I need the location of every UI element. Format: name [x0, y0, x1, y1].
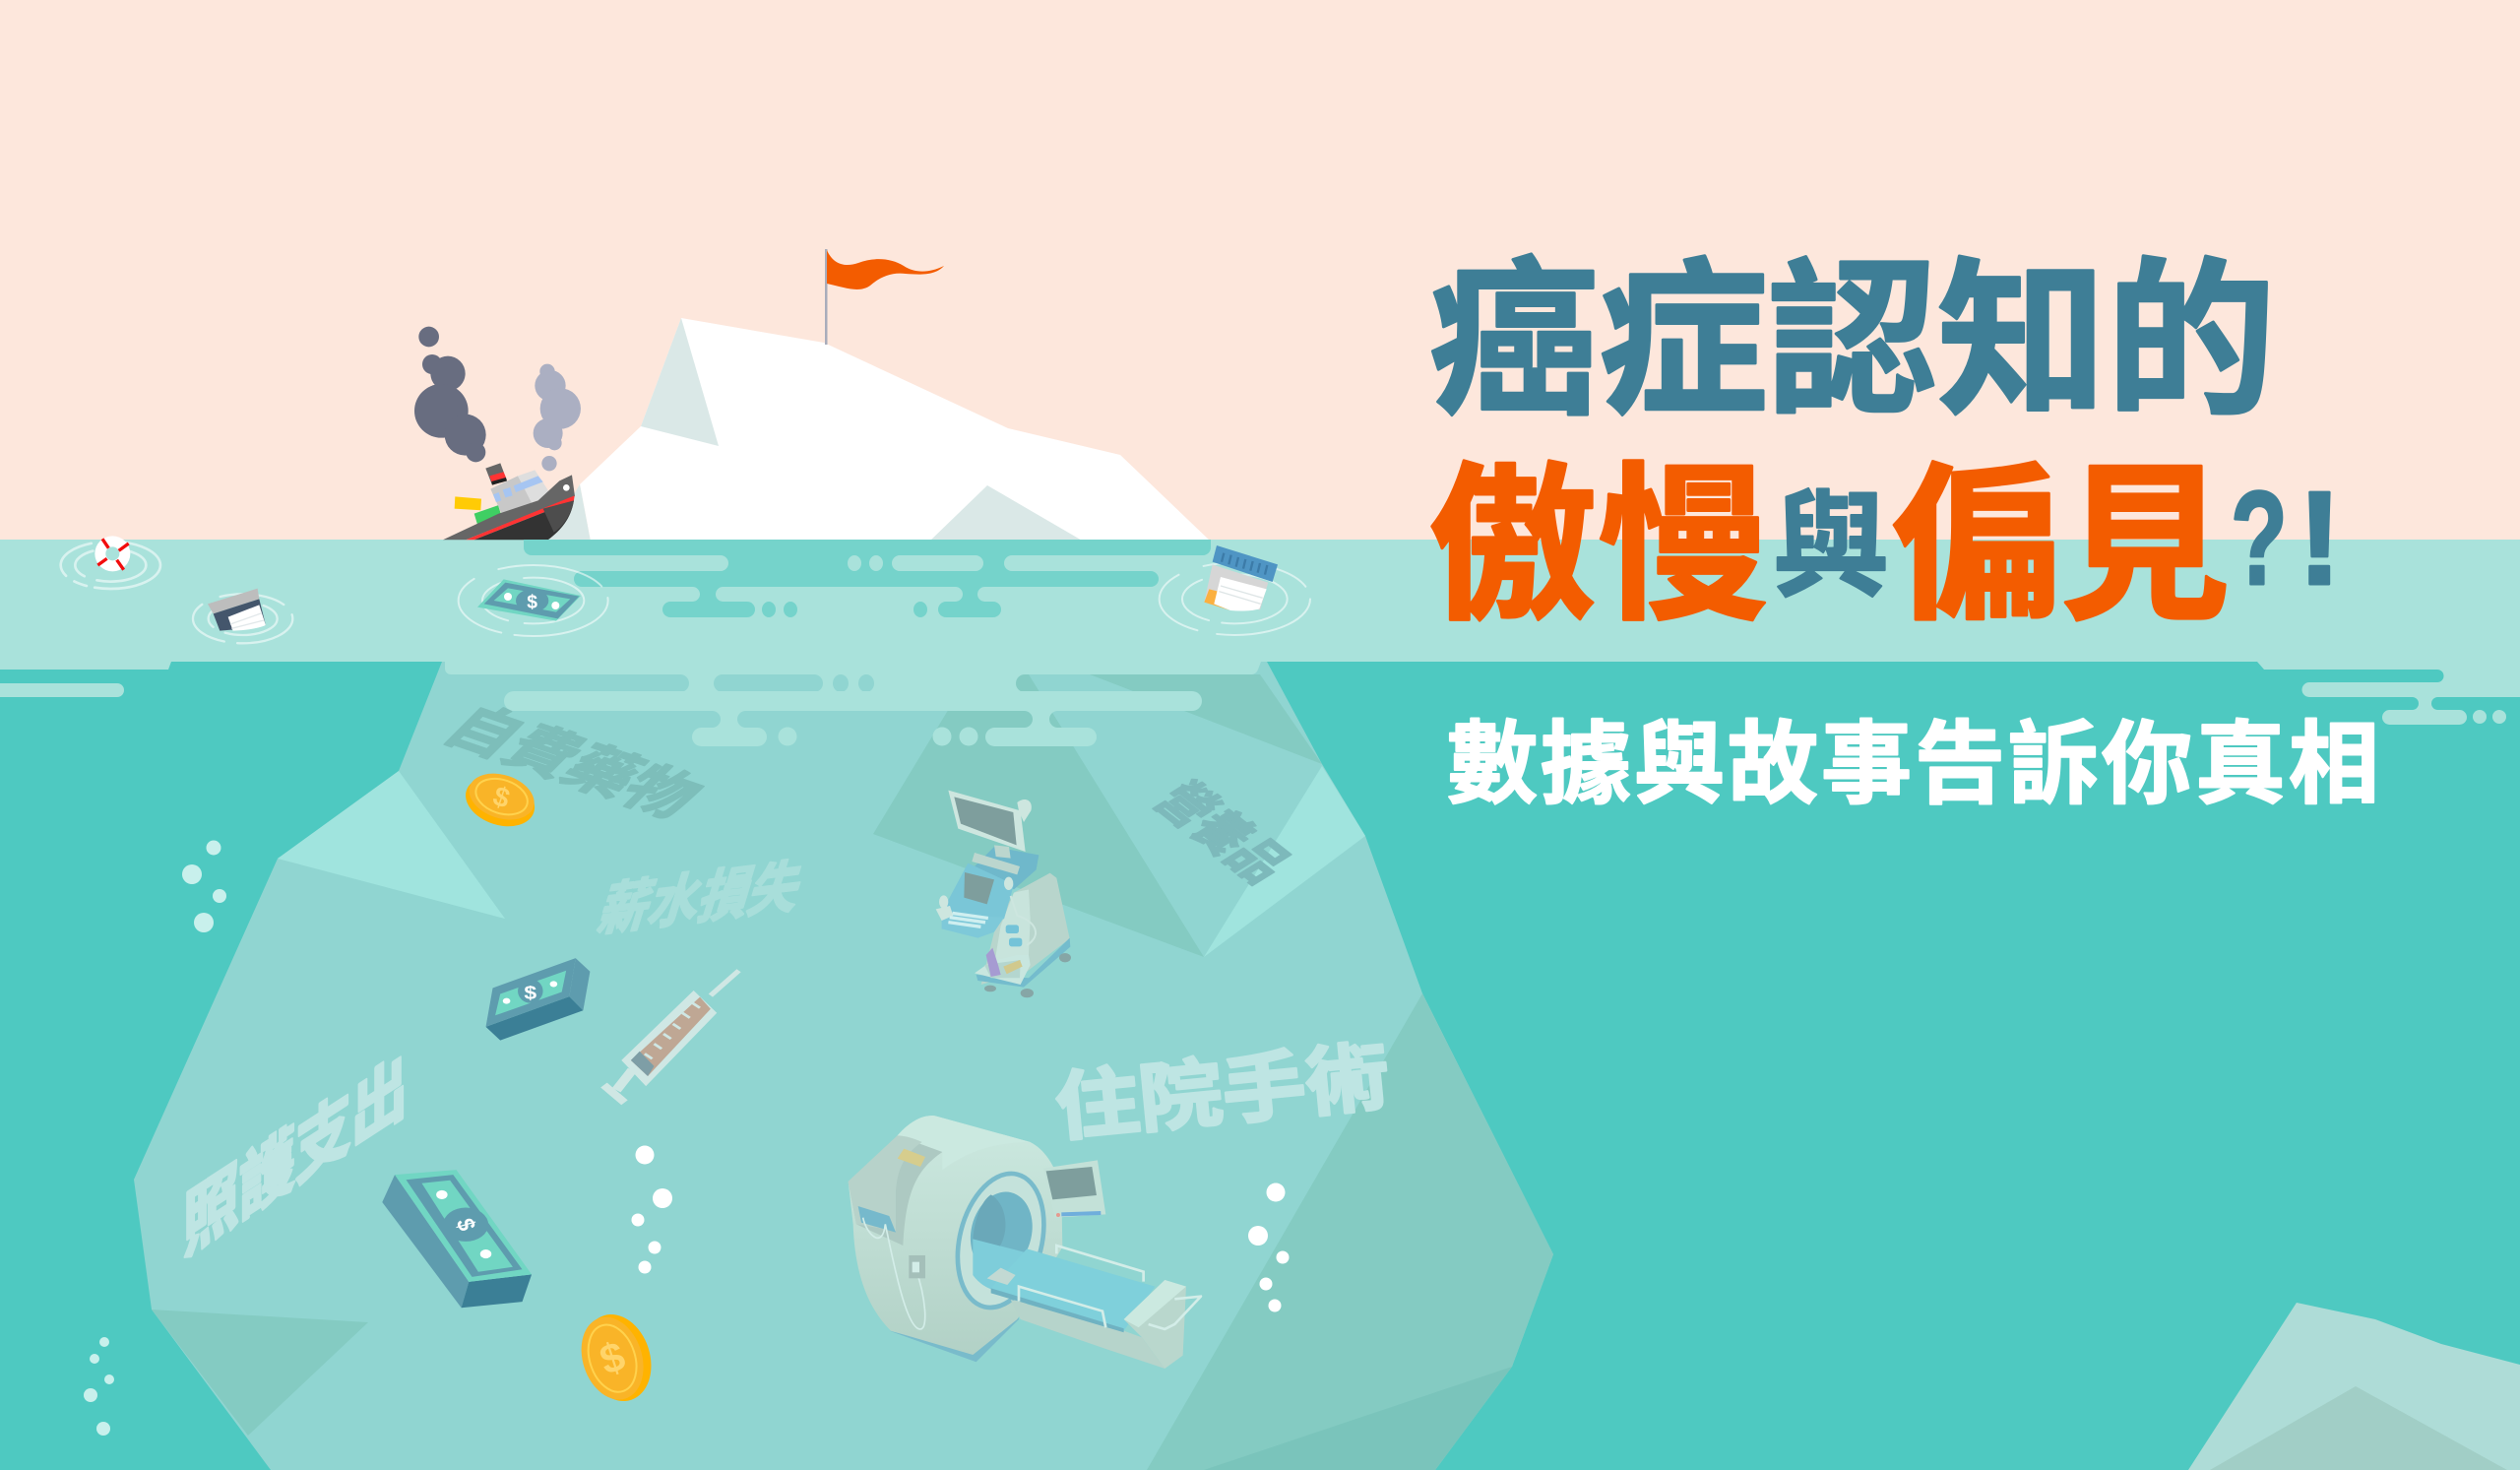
floating money with ripples [459, 565, 608, 636]
light smoke [534, 364, 581, 471]
coin lower: $ [595, 1332, 630, 1383]
ship body [443, 463, 575, 540]
small iceberg bottom right [2188, 1303, 2520, 1470]
facet bottom right [1204, 1367, 1512, 1470]
upper water surface bars [524, 540, 1211, 617]
flag on iceberg [825, 249, 944, 345]
title word and: 與 [1773, 482, 1889, 612]
label: nutrition supplements: 營養品 [1141, 774, 1302, 892]
floating bottle with ripples [1160, 545, 1310, 635]
coin upper: $ [489, 780, 514, 814]
money stack small [486, 958, 590, 1041]
coin upper [459, 765, 542, 835]
money stack large [382, 1170, 532, 1308]
syringe [603, 971, 739, 1103]
right deep bars and dots [2362, 694, 2520, 725]
facet upper left [278, 771, 505, 919]
money stack small: $ [524, 984, 537, 1003]
floating box with ripples [193, 589, 292, 643]
title exclamation mark: ! [2298, 464, 2342, 612]
underwater bars over iceberg [445, 662, 1261, 746]
subtitle: 數據與故事告訴你真相 [1447, 715, 2382, 815]
pale shelf right [2257, 662, 2520, 697]
deep water background [0, 662, 2520, 1470]
sinking ship with smoke [414, 327, 581, 540]
facet upper right [1204, 766, 1365, 957]
bubbles lower left [84, 1337, 114, 1436]
pale cut-outs in surface bars [630, 555, 1083, 602]
money stack large: $ [451, 1215, 482, 1234]
label: lost wages: 薪水損失 [592, 854, 811, 942]
bubbles centre [632, 1146, 672, 1274]
facet lower right [1147, 993, 1553, 1470]
life ring with ripples [61, 536, 160, 589]
facet upper right dark [1090, 674, 1322, 764]
bubbles left [182, 841, 226, 932]
iceberg tip above water [546, 318, 1211, 542]
submerged iceberg [134, 662, 1553, 1470]
label: care expenses: 照護支出 [183, 1044, 408, 1271]
title line two [1428, 452, 2342, 641]
bubbles right [1248, 1183, 1290, 1311]
coin lower [571, 1306, 662, 1411]
facet lower left [152, 1310, 368, 1436]
title question mark: ? [2231, 464, 2288, 612]
sky background [0, 0, 2520, 540]
floating money with ripples: $ [527, 592, 537, 612]
label: self-paid medicine: 自費藥物 [430, 697, 716, 828]
ultrasound machine [936, 791, 1071, 997]
dark smoke [414, 327, 486, 462]
shallow water band [0, 540, 2520, 662]
label: hospital surgery: 住院手術 [1051, 1036, 1393, 1151]
title line one: 癌症認知的 [1429, 247, 2276, 436]
pale shelf left [0, 662, 171, 670]
title word arrogance: 傲慢 [1428, 452, 1767, 641]
left floating bar [0, 683, 124, 697]
title word prejudice: 偏見 [1891, 452, 2230, 641]
facet centre [873, 674, 1204, 957]
MRI scanner [849, 1116, 1201, 1369]
